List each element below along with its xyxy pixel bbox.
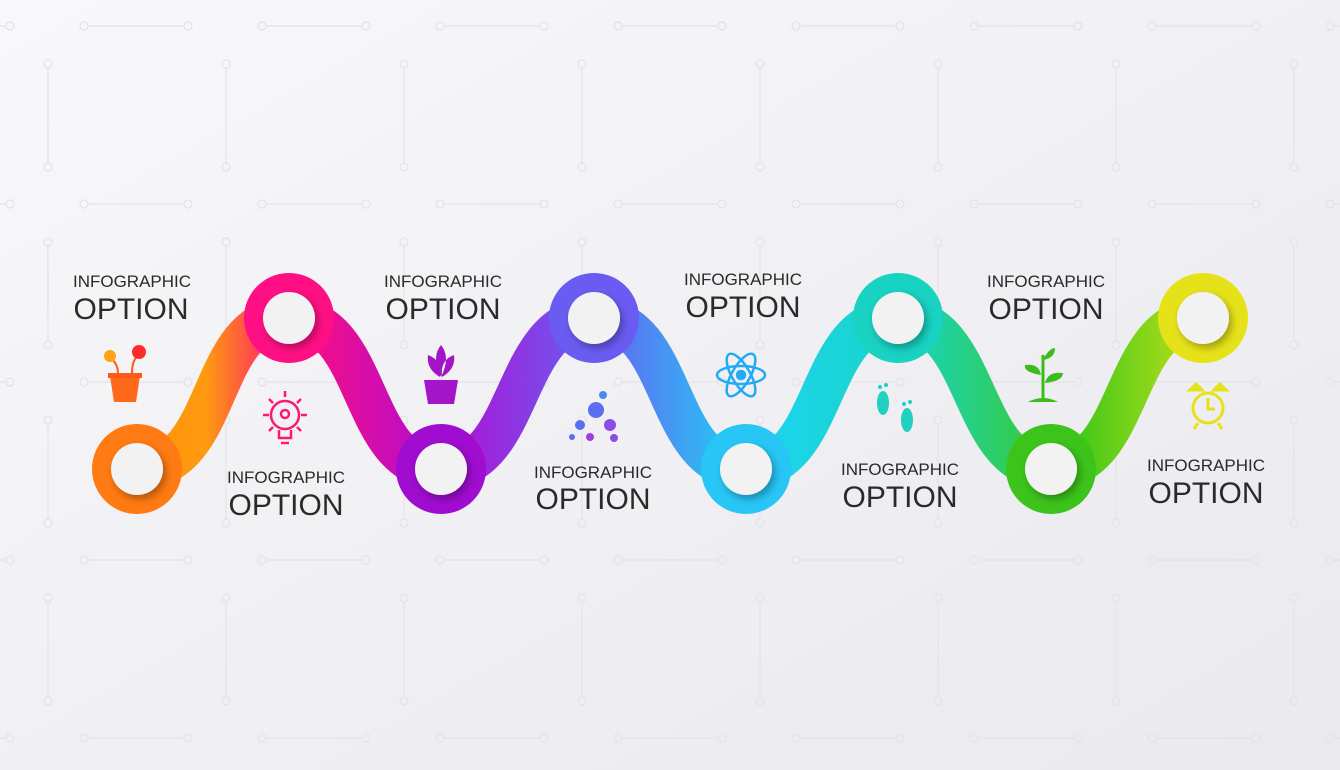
label 4: OPTION: [535, 483, 651, 516]
node 7: [1006, 424, 1096, 514]
label 5: [684, 270, 802, 324]
label 8: INFOGRAPHIC: [1147, 456, 1265, 475]
node 1: [92, 424, 182, 514]
icon: light bulb: [263, 391, 307, 443]
icon: flower pot: [104, 345, 146, 402]
wave band: [137, 318, 1203, 469]
label 1: INFOGRAPHIC: [73, 272, 191, 291]
icon: footprints: [877, 383, 913, 432]
label 7: OPTION: [988, 293, 1104, 326]
label 6: INFOGRAPHIC: [841, 460, 959, 479]
label 3: [384, 272, 502, 326]
icon: atom: [717, 350, 765, 400]
node 2: [244, 273, 334, 363]
label 2: [227, 468, 345, 522]
label 8: [1147, 456, 1265, 510]
node 8: [1158, 273, 1248, 363]
node 5: [701, 424, 791, 514]
label 1: [73, 272, 191, 326]
label 7: [987, 272, 1105, 326]
label 3: OPTION: [385, 293, 501, 326]
label 6: [841, 460, 959, 514]
label 8: OPTION: [1148, 477, 1264, 510]
label 6: OPTION: [842, 481, 958, 514]
icon: succulent plant: [424, 345, 458, 404]
label 4: INFOGRAPHIC: [534, 463, 652, 482]
icon: sprout: [1025, 348, 1063, 402]
node 6: [853, 273, 943, 363]
label 5: INFOGRAPHIC: [684, 270, 802, 289]
label 4: [534, 463, 652, 516]
label 1: OPTION: [73, 293, 189, 326]
label 3: INFOGRAPHIC: [384, 272, 502, 291]
label 2: OPTION: [228, 489, 344, 522]
label 5: OPTION: [685, 291, 801, 324]
icon: alarm clock: [1190, 384, 1226, 429]
icon: bubbles: [569, 391, 618, 442]
label 7: INFOGRAPHIC: [987, 272, 1105, 291]
label 2: INFOGRAPHIC: [227, 468, 345, 487]
node 4: [549, 273, 639, 363]
node 3: [396, 424, 486, 514]
